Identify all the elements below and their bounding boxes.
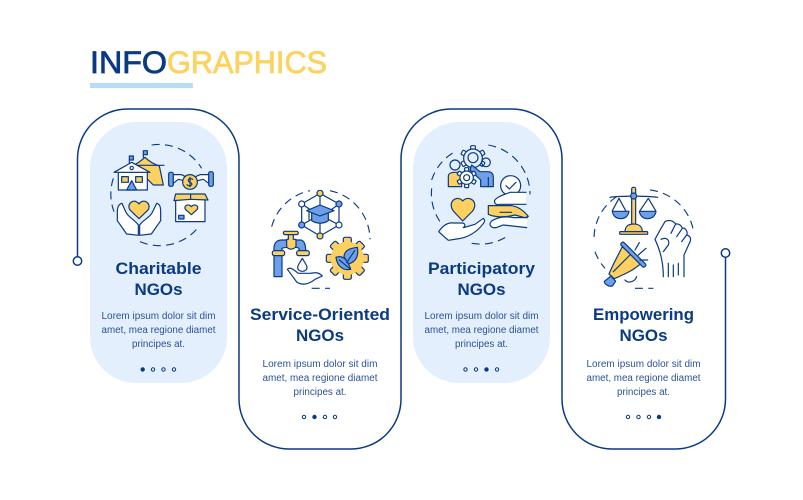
text block: participatory: principes at. <box>455 339 508 350</box>
right end marker <box>721 249 730 257</box>
text block: empowering: principes at. <box>617 387 670 398</box>
text block: service-oriented: Service-Oriented <box>250 305 390 324</box>
text block: participatory: Participatory <box>428 259 536 278</box>
text block: service-oriented: NGOs <box>296 326 344 345</box>
connecting outline <box>78 109 726 449</box>
text block: empowering: Lorem ipsum dolor sit dim <box>586 359 700 370</box>
text block: service-oriented: Lorem ipsum dolor sit dim <box>262 359 378 370</box>
title <box>90 44 327 80</box>
text block: empowering <box>586 305 701 398</box>
left end marker <box>73 257 82 265</box>
pagination dots: empowering <box>626 415 661 419</box>
panel: participatory background <box>413 122 550 383</box>
icon: participatory NGOs <box>431 145 530 244</box>
text block: charitable: Charitable <box>116 259 202 278</box>
pagination dots: service-oriented <box>302 415 337 419</box>
text block: service-oriented: principes at. <box>294 387 346 398</box>
text block: service-oriented <box>250 305 390 398</box>
pagination dots: charitable <box>141 368 176 371</box>
title: INFO <box>90 44 167 80</box>
text block: empowering: amet, mea regione diamet <box>586 373 701 384</box>
text block: participatory: Lorem ipsum dolor sit dim <box>424 311 538 322</box>
title underline <box>90 83 193 88</box>
pagination dots: participatory <box>464 368 499 371</box>
icon: service-oriented NGOs <box>272 190 370 288</box>
text block: empowering: Empowering <box>593 305 694 324</box>
text block: charitable: NGOs <box>134 280 182 299</box>
text block: participatory: amet, mea regione diamet <box>424 325 539 336</box>
text block: charitable: principes at. <box>132 339 185 350</box>
panel: charitable background <box>90 122 227 383</box>
icon: empowering NGOs <box>594 187 693 288</box>
title: GRAPHICS <box>167 44 327 80</box>
icon: charitable NGOs <box>111 144 213 246</box>
text block: participatory: NGOs <box>458 280 506 299</box>
text block: charitable: Lorem ipsum dolor sit dim <box>102 311 216 322</box>
text block: empowering: NGOs <box>620 326 668 345</box>
text block: charitable: amet, mea regione diamet <box>102 325 216 336</box>
text block: participatory <box>424 259 539 350</box>
text block: charitable <box>102 259 216 350</box>
text block: service-oriented: amet, mea regione diamet <box>262 373 378 384</box>
